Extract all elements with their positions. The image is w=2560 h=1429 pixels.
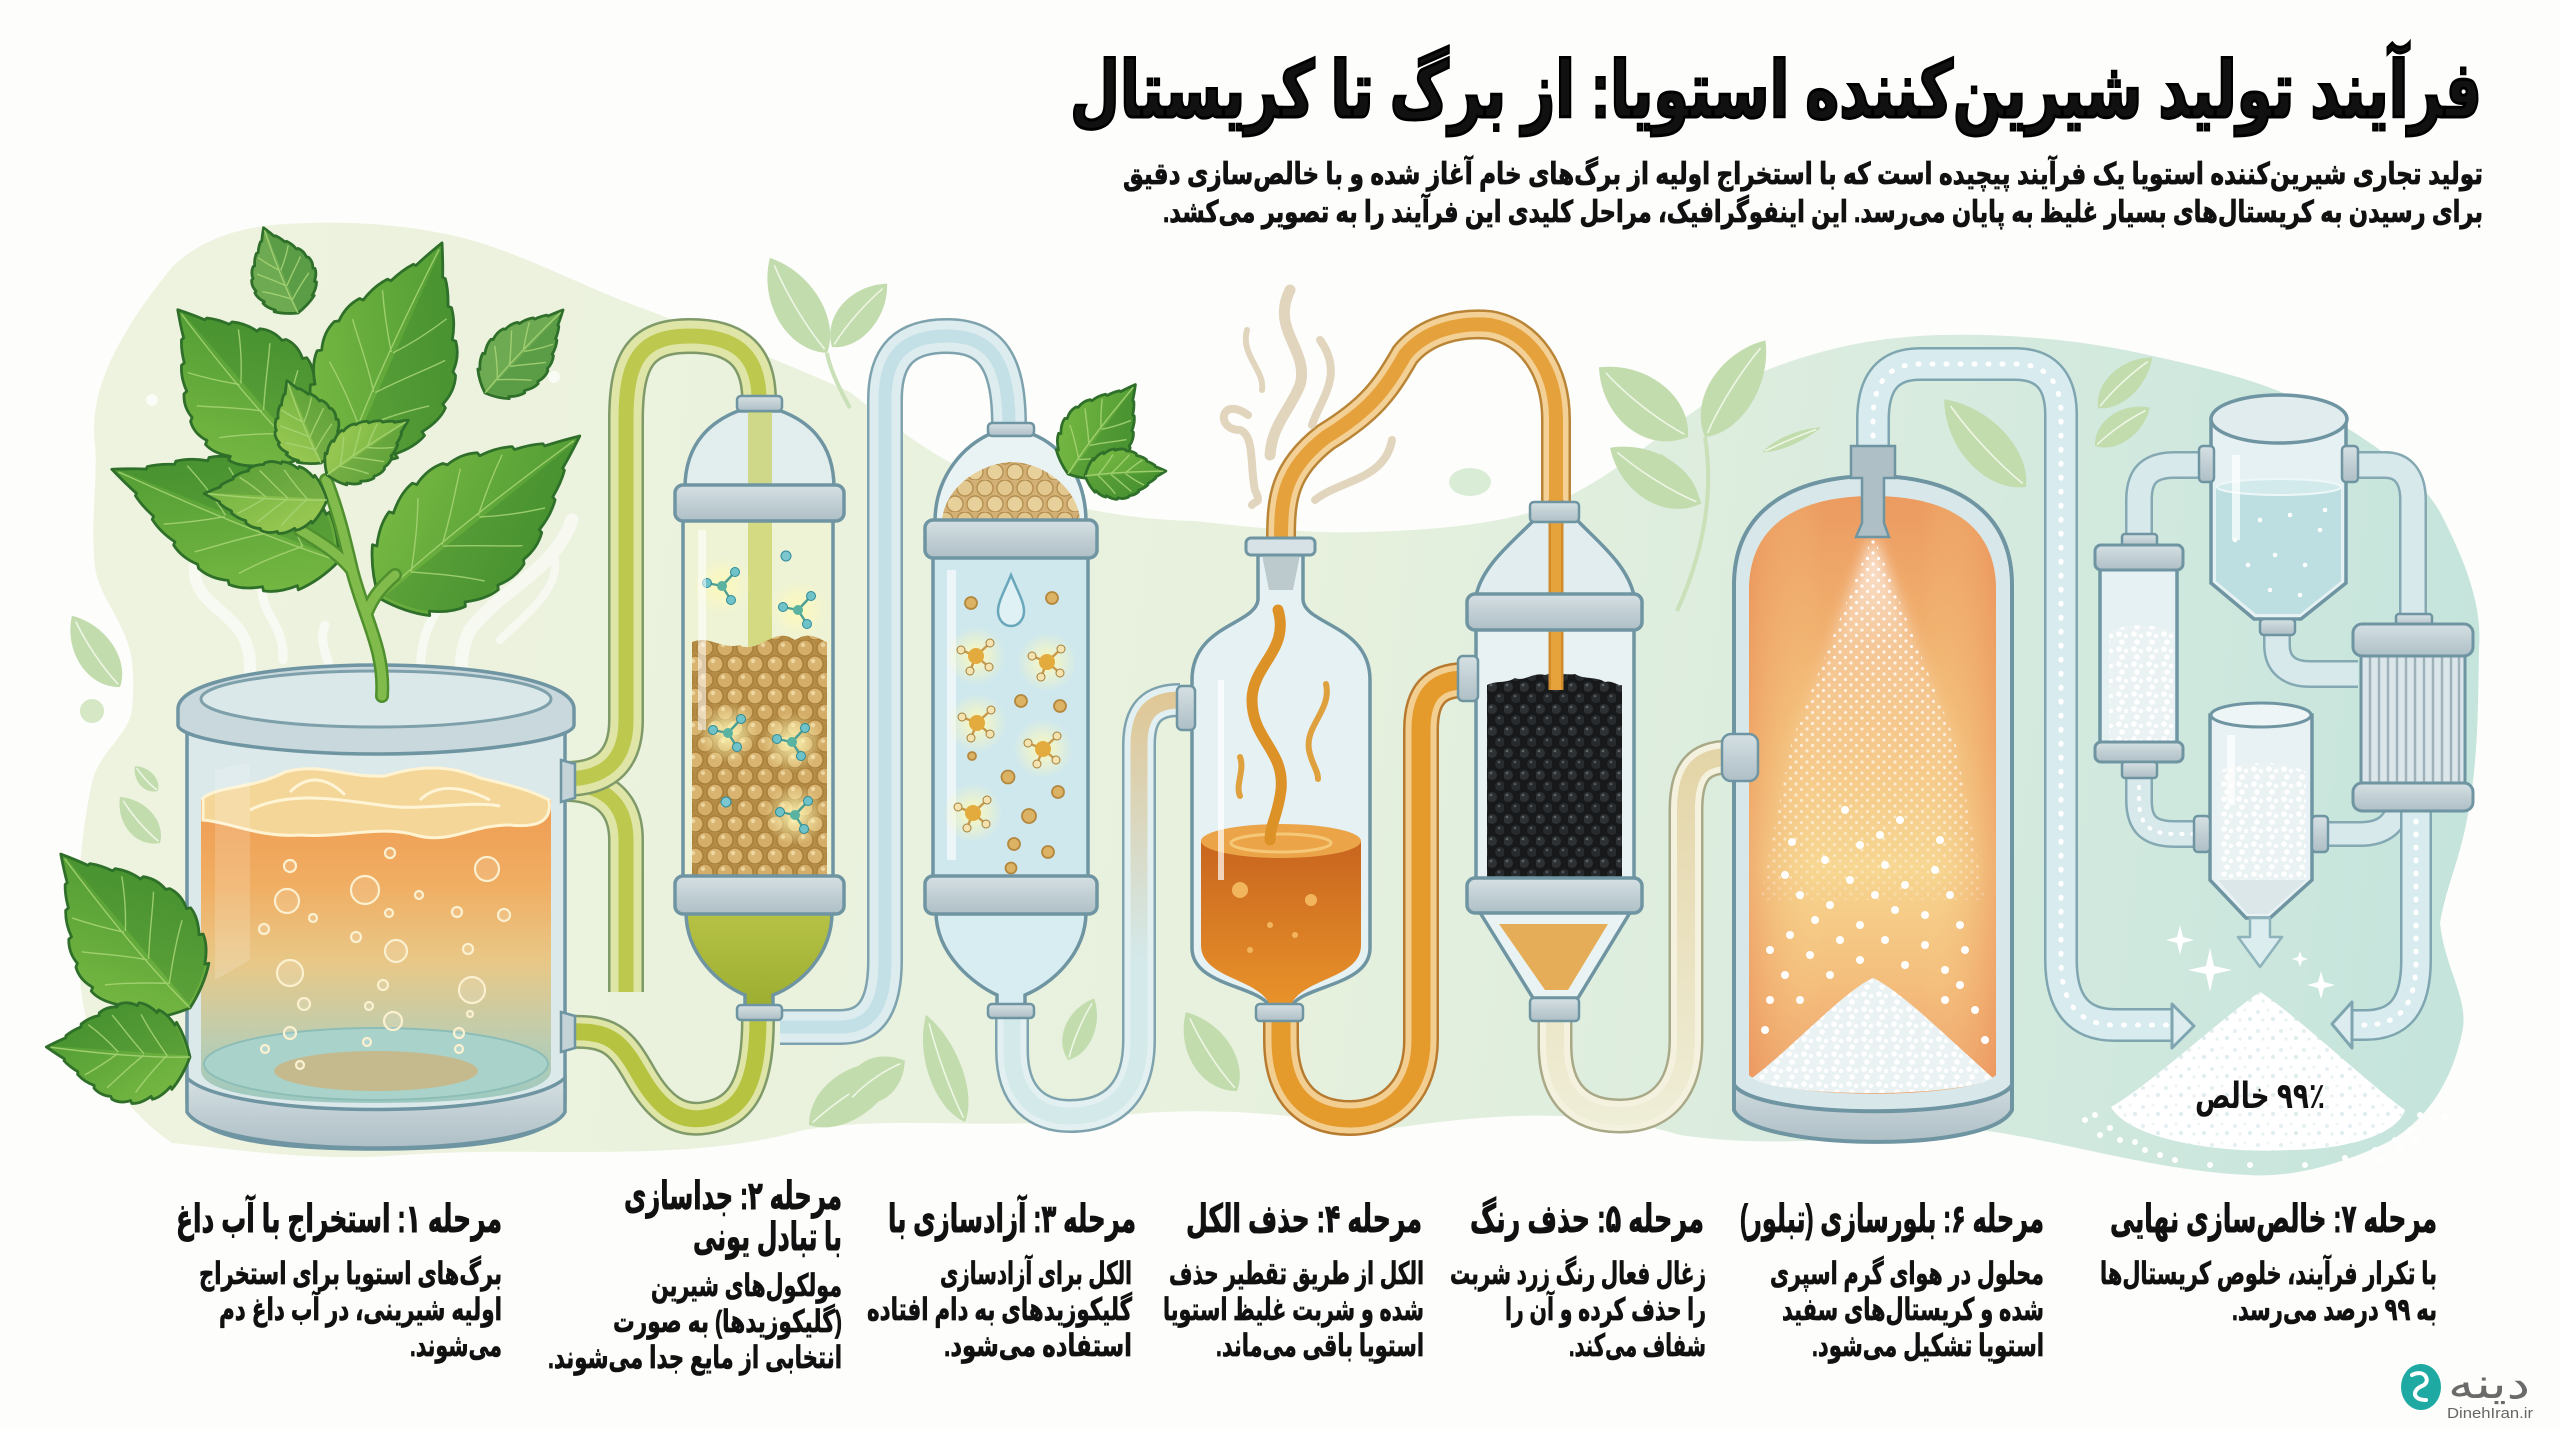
pleated filter [2353,614,2473,811]
crystal pile [1752,978,1993,1093]
beads in suspension [965,592,1066,874]
dome [935,434,1086,522]
pipe: step 5 to step 6 [1555,757,1730,1116]
pipe: step 6 to final product [1873,364,2194,1048]
stopper and collar [1262,555,1300,590]
step 4 caption: شده و شربت غلیظ استویا [1163,1292,1424,1328]
step 2 caption: مولکول‌های شیرین [651,1268,842,1304]
carbon bed [1487,673,1622,886]
dome [1476,521,1634,596]
highlight [1218,680,1224,880]
panel: step 7 final purification [2085,395,2473,1165]
bottom bulb [686,912,832,1007]
step 5 caption [1450,1196,1706,1363]
logo url: DinehIran.ir [2447,1405,2533,1422]
bottom connector [1256,1004,1303,1021]
step 2 caption: انتخابی از مایع جدا می‌شوند. [548,1340,842,1376]
background blob [78,223,2479,1175]
scattered powder [2085,1115,2445,1165]
step 7 caption: به ۹۹ درصد می‌رسد. [2232,1292,2437,1328]
final powder pile [2111,992,2405,1151]
pipe: step 4 to step 5 [1281,680,1465,1118]
step 6 caption [1740,1198,2044,1364]
dome [685,411,834,488]
tank rim [178,665,574,754]
panel: step 3 release column [925,423,1097,1018]
water drop [998,575,1024,626]
step 5 caption: را حذف کرده و آن را [1505,1290,1706,1328]
highlight [947,570,956,860]
pipe: step 3 to step 4 [1012,700,1180,1116]
connectors [988,423,1034,436]
panel: step 4 alcohol removal flask [1177,290,1392,1021]
glass highlight [698,530,706,730]
leaves by step 3 column [1039,363,1167,501]
step 4 caption: مرحله ۴: حذف الکل [1186,1198,1422,1242]
sediment pool [204,1028,548,1100]
stem [300,480,395,696]
step 6 caption: محلول در هوای گرم اسپری [1770,1255,2044,1292]
small front leaves [257,368,351,475]
molecules [692,551,828,845]
amber liquid [1201,841,1361,1003]
step 4 caption [1163,1198,1424,1364]
released molecules [943,626,1077,843]
step 5 caption: مرحله ۵: حذف رنگ [1470,1196,1704,1242]
step 3 caption: الکل برای آزادسازی [940,1254,1132,1292]
panel: step 5 activated carbon column [1458,500,1642,1021]
step 1 caption [176,1194,502,1364]
connectors [1530,502,1579,522]
falling crystals [1765,810,1985,1040]
steam over tank [195,520,572,710]
pipe: steam pipe from step 4 to step 5 [1281,324,1556,540]
tank body [187,725,565,1149]
step 3 caption: استفاده می‌شود. [944,1328,1132,1364]
body glass [933,556,1088,877]
dome beads [942,462,1080,520]
resin beads [692,636,827,886]
intro text [1123,155,2483,230]
logo wordmark: دینه [2448,1360,2530,1407]
step 3 caption [867,1194,1136,1364]
hot chamber [1749,496,1996,1094]
pipes [2139,465,2416,1048]
step 2 caption: مرحله ۲: جداسازی [624,1175,842,1219]
tower base [1734,1075,2012,1142]
label: 99% pure: ۹۹٪ خالص [2195,1075,2325,1117]
liquid [201,782,551,1103]
upper vessel [2199,395,2358,635]
pipe: step 1 to step 2 (upper) [565,336,759,992]
step 3 caption: مرحله ۳: آزادسازی با [888,1194,1136,1242]
plant [88,214,623,696]
liquid column [748,400,772,650]
step 1 caption: اولیه شیرینی، در آب داغ دم [219,1290,502,1328]
flanges [1467,594,1642,630]
side connectors [561,760,575,1052]
logo mark [2401,1364,2441,1410]
flask glass [1192,555,1370,1005]
flanges [925,520,1097,558]
step 2 caption [548,1175,842,1376]
spray cone [1760,535,1985,900]
pipe: step 2 to step 3 [780,336,1009,1027]
bubbles [259,848,510,1069]
step 7 caption: مرحله ۷: خالص‌سازی نهایی [2110,1198,2437,1242]
logo [2401,1360,2533,1422]
decorative pale leaves [55,247,2161,1143]
floating leaves [233,216,587,415]
step 6 caption: استویا تشکیل می‌شود. [1812,1328,2044,1364]
step 7 caption [2100,1198,2437,1328]
step 4 caption: استویا باقی می‌ماند. [1216,1328,1424,1364]
foam [203,768,549,838]
nozzle [1851,446,1895,537]
pipe: step 2 return to step 1 [565,1018,758,1119]
cone [1479,911,1631,998]
step 3 caption: گلیکوزیدهای به دام افتاده [867,1291,1133,1328]
arrow: down into powder pile [2238,918,2282,967]
step 1 caption: مرحله ۱: استخراج با آب داغ [176,1194,502,1242]
amber bubbles [1232,882,1317,953]
body glass [1476,626,1634,880]
bottom-left leaves [11,812,240,1107]
step 6 caption: شده و کریستال‌های سفید [1782,1292,2044,1328]
panel: step 1 tank [178,665,575,1149]
tank base band [187,1078,565,1148]
tower shell [1734,476,2012,1111]
step 1 caption: برگ‌های استویا برای استخراج [199,1255,502,1292]
steam wisps [1224,290,1392,505]
step 6 caption: مرحله ۶: بلورسازی (تبلور) [1740,1198,2044,1242]
step 2 caption: (گلیکوزیدها) به صورت [613,1303,842,1340]
left filter column [2095,534,2183,778]
leaves behind [88,411,363,619]
connectors [737,396,782,411]
panel: step 6 spray crystallization tower [1722,446,2012,1142]
step 1 caption: می‌شوند. [410,1328,502,1364]
side connector [1722,734,1758,781]
side connector [1177,686,1195,730]
glass highlights [215,762,250,980]
step 5 caption: شفاف می‌کند. [1569,1328,1706,1363]
step 2 caption: با تبادل یونی [693,1216,842,1260]
bottom bulb [936,912,1086,1007]
inlet tube [1548,500,1564,690]
sparkles [2166,925,2335,999]
stream [1252,610,1281,840]
lower vessel with powder [2194,703,2328,918]
panel: step 2 ion exchange column [675,396,844,1020]
flanges [675,485,844,521]
step 5 caption: زغال فعال رنگ زرد شربت [1450,1256,1706,1292]
body glass [683,519,833,877]
step 4 caption: الکل از طریق تقطیر حذف [1169,1256,1424,1292]
